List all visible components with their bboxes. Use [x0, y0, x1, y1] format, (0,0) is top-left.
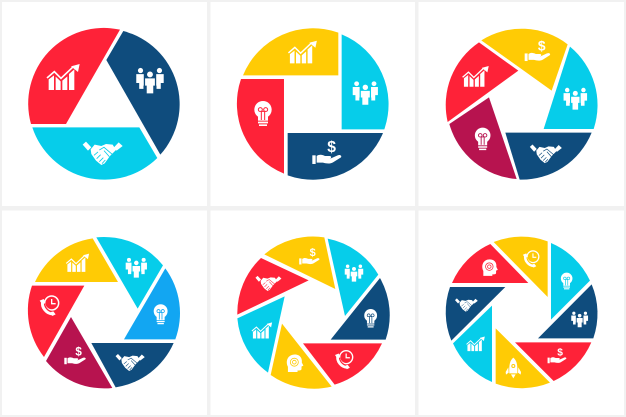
icon: handshake	[116, 354, 145, 371]
segment: cyan	[328, 239, 378, 316]
segment: yellow bottom	[496, 328, 550, 388]
icon: light bulb	[364, 309, 377, 328]
segment: navy left	[446, 287, 505, 341]
icon: dollar in hand	[312, 139, 341, 164]
segment: cyan right	[551, 243, 590, 320]
panel: three-segment circle	[28, 28, 180, 180]
segment: cyan	[96, 237, 163, 309]
icon: people	[564, 88, 587, 110]
icon: growth chart	[288, 41, 317, 63]
segment: cyan	[32, 127, 157, 180]
icon: dollar in hand	[525, 38, 550, 61]
segment: navy right	[538, 284, 598, 338]
icon: people	[126, 258, 147, 278]
icon: people	[353, 81, 378, 105]
segment: cyan left	[453, 306, 492, 382]
panel: seven-segment circle	[237, 236, 390, 389]
icon: dollar in hand	[548, 347, 566, 363]
icon: phone and clock	[40, 296, 59, 316]
segment: yellow	[481, 29, 568, 91]
icon: dollar in hand: $	[557, 347, 563, 358]
icon: dollar in hand: $	[327, 139, 336, 156]
segment: navy	[106, 31, 180, 155]
segment: navy	[91, 343, 174, 387]
segment: yellow	[243, 28, 338, 75]
icon: handshake	[455, 298, 478, 312]
icon: dollar in hand	[299, 247, 319, 264]
segment: red upper left	[237, 258, 309, 315]
panel: eight-segment circle	[446, 237, 598, 388]
segment: red	[28, 286, 84, 357]
icon: light bulb	[154, 304, 168, 324]
icon: head with gear	[482, 259, 498, 276]
icon: light bulb	[475, 128, 490, 150]
icon: dollar in hand	[64, 346, 86, 364]
segment: yellow	[35, 238, 118, 282]
segment: red	[237, 79, 284, 174]
icon: growth chart	[467, 337, 485, 351]
icon: growth chart	[463, 66, 489, 87]
segment: plum	[449, 97, 517, 179]
icon: people	[136, 68, 164, 93]
segment: yellow	[264, 236, 335, 289]
icon: people	[345, 265, 363, 282]
segment: cyan left	[237, 296, 285, 373]
icon: light bulb	[254, 101, 272, 126]
segment: red	[28, 28, 120, 124]
panel: five-segment circle	[446, 29, 598, 180]
segment: red upper	[452, 244, 528, 283]
icon: dollar in hand: $	[538, 38, 546, 53]
panel: four-segment circle	[237, 28, 389, 180]
icon: growth chart	[47, 64, 80, 90]
segment: red	[303, 343, 382, 385]
icon: people	[571, 312, 588, 327]
segment: navy	[288, 133, 383, 180]
icon: growth chart	[252, 322, 272, 339]
panel: six-segment circle	[28, 237, 180, 388]
segment: cyan	[342, 34, 389, 129]
segment: plum	[46, 317, 112, 388]
icon: handshake	[255, 276, 281, 291]
segment: cyan	[544, 47, 598, 129]
icon: phone and clock	[523, 251, 539, 268]
segment: navy	[331, 278, 390, 340]
segment: red lower	[515, 342, 591, 381]
icon: growth chart	[66, 254, 89, 272]
segment: navy	[505, 133, 592, 180]
icon: rocket	[506, 358, 521, 378]
icon: light bulb	[561, 273, 572, 289]
icon: handshake	[530, 145, 562, 163]
icon: head with gear	[287, 354, 303, 372]
segment: yellow lower	[271, 324, 332, 389]
icon: phone and clock	[335, 351, 353, 369]
segment: blue	[124, 268, 180, 339]
segment: yellow top	[494, 237, 548, 297]
icon: dollar in hand: $	[75, 346, 82, 358]
icon: handshake	[83, 142, 123, 165]
segment: red	[446, 42, 518, 122]
icon: dollar in hand: $	[310, 247, 316, 259]
